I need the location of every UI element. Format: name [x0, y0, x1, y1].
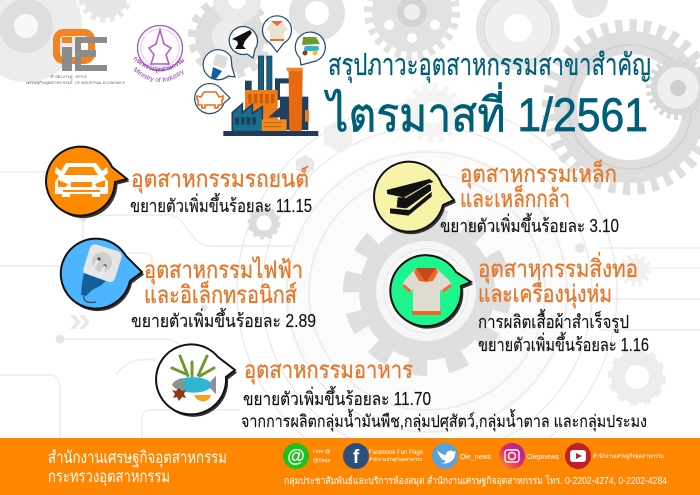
big gear behind garments	[351, 216, 503, 368]
logo: Ministry of Industry seal: กระทรวงอุตสาหกรรม	[133, 57, 184, 74]
panel: food	[156, 344, 647, 432]
icon: facebook: Facebook Fan Page	[369, 449, 423, 456]
icon: food bubble	[156, 344, 237, 417]
icon: line	[283, 443, 331, 469]
icon: facebook: สำนักงานเศรษฐกิจอุตสาหกรรม	[369, 456, 422, 463]
panel: electrical and electronics: และอิเล็กทรอนิกส์	[144, 280, 297, 309]
panel: automotive	[46, 147, 312, 218]
logo: Office of Industrial Economics: OF INDUSTRIAL ECONOMICS	[75, 80, 125, 85]
title: ไตรมาสที่ 1/2561	[323, 82, 648, 141]
icon: youtube	[565, 443, 664, 469]
panel: iron and steel: ขยายตัวเพิ่มขึ้นร้อยละ 3.10	[440, 213, 619, 236]
logo: Office of Industrial Economics: OFFICE	[75, 74, 87, 79]
footer: organisation name	[48, 448, 227, 487]
logo: Office of Industrial Economics	[26, 32, 125, 86]
icon bubble: shirt	[262, 16, 291, 52]
logo: Office of Industrial Economics: สำนักงาน	[50, 74, 71, 79]
icon: steel beam bubble	[374, 162, 456, 234]
panel: food: ขยายตัวเพิ่มขึ้นร้อยละ 11.70	[243, 386, 431, 409]
panel: electrical and electronics	[61, 239, 316, 331]
icon: facebook: f	[353, 447, 360, 468]
panel: automotive: ขยายตัวเพิ่มขึ้นร้อยละ 11.15	[130, 193, 312, 216]
panel: automotive: อุตสาหกรรมรถยนต์	[131, 165, 309, 194]
logo: Ministry of Industry seal	[133, 24, 184, 82]
icon: shirt bubble	[390, 255, 473, 329]
logo: Ministry of Industry seal: Ministry of Industry	[134, 67, 184, 82]
icon: line: Line @	[313, 449, 331, 455]
icon: youtube: สำนักงานเศรษฐกิจอุตสาหกรรม	[593, 453, 664, 460]
logo: Office of Industrial Economics: เศรษฐกิจอุตสาหกรรม	[26, 80, 71, 86]
panel: iron and steel: อุตสาหกรรมเหล็ก	[460, 159, 617, 189]
panel: textile and garments: ขยายตัวเพิ่มขึ้นร้อยละ 1.16	[478, 332, 649, 355]
panel: iron and steel: และเหล็กกล้า	[460, 184, 570, 213]
icon: car bubble	[46, 147, 129, 218]
icon: line: @	[287, 446, 305, 466]
top middle gears	[372, 0, 452, 52]
icon: facebook	[343, 443, 423, 469]
panel: textile and garments: การผลิตเสื้อผ้าสำเร็จรูป	[478, 309, 629, 333]
panel: electrical and electronics: ขยายตัวเพิ่มขึ้นร้อยละ 2.89	[131, 308, 316, 331]
icon: instagram	[499, 443, 559, 469]
panel: textile and garments	[390, 252, 649, 355]
icon: plug bubble	[61, 239, 144, 311]
illustration: factory with speech bubbles	[195, 16, 325, 136]
top left gears	[0, 0, 82, 82]
footer bar	[0, 438, 700, 495]
icon: instagram: Oiepnews	[527, 452, 559, 461]
icon bubble: car	[195, 84, 230, 114]
panel: textile and garments: และเครื่องนุ่งห่ม	[478, 277, 612, 309]
icon bubble: steel	[229, 27, 258, 58]
icon bubble: plug	[203, 50, 235, 80]
big gear top right	[550, 27, 700, 187]
panel: electrical and electronics: อุตสาหกรรมไฟฟ้า	[144, 256, 303, 285]
panel: textile and garments: อุตสาหกรรมสิ่งทอ	[478, 252, 638, 284]
panel: iron and steel	[374, 159, 619, 236]
footer: organisation name: กระทรวงอุตสาหกรรม	[48, 467, 170, 487]
icon: twitter	[432, 443, 491, 469]
icon: line: @0iepr	[313, 458, 331, 464]
icon bubble: food	[295, 32, 325, 65]
footer: organisation name: สำนักงานเศรษฐกิจอุตสาหกรรม	[48, 448, 227, 468]
title	[323, 49, 651, 141]
factory	[223, 56, 318, 136]
small gears	[253, 212, 275, 234]
gears behind factory	[195, 2, 265, 72]
panel: food: อุตสาหกรรมอาหาร	[244, 357, 413, 385]
icon: twitter: Oie_news	[460, 452, 491, 461]
